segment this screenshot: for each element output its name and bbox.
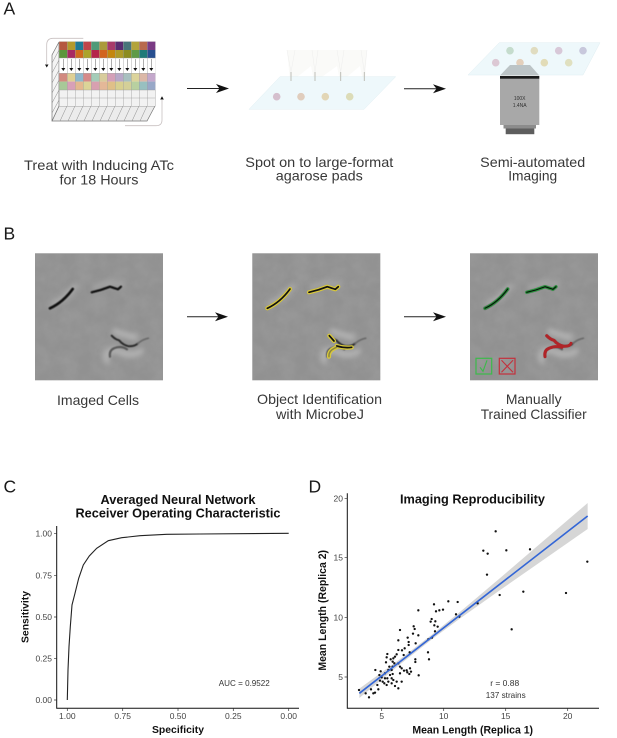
icon: green check box <box>476 358 492 374</box>
chart: reproducibility scatter <box>317 492 599 736</box>
caption: classifier: Trained Classifier <box>481 406 587 422</box>
caption: imaging: Imaging <box>508 168 557 184</box>
caption: classifier <box>481 391 587 422</box>
x tick labels: 10 <box>439 711 449 721</box>
chart title: Averaged Neural Network <box>100 493 256 507</box>
chart title: Receiver Operating Characteristic <box>76 506 281 520</box>
caption: classifier: Manually <box>506 391 562 407</box>
icon: pipette tips over agarose pad <box>249 50 396 109</box>
micrograph: imaged cells <box>35 253 163 380</box>
label: C: C <box>4 477 16 497</box>
y tick labels: 10 <box>334 612 343 622</box>
caption: spot: agarose pads <box>276 168 363 184</box>
x tick labels: 0.75 <box>114 711 131 721</box>
x tick labels: 15 <box>501 711 511 721</box>
y tick labels: 15 <box>334 553 343 563</box>
y tick labels <box>334 494 343 682</box>
correlation annotation <box>486 678 526 700</box>
chart title: Imaging Reproducibility <box>400 492 545 506</box>
caption: treat: for 18 Hours <box>60 171 138 187</box>
y tick labels: 5 <box>338 672 343 682</box>
x tick labels <box>59 711 297 721</box>
caption: object identification <box>257 391 382 422</box>
y tick labels: 0.25 <box>35 654 52 664</box>
arrow: imaged to identified <box>187 312 228 321</box>
caption: spot: Spot on to large-format <box>245 154 393 170</box>
x tick labels: 1.00 <box>59 711 76 721</box>
correlation annotation: 137 strains <box>486 690 526 700</box>
icon: slide and microscope objective <box>468 43 600 134</box>
ROC line <box>67 533 289 700</box>
data points <box>358 530 588 698</box>
caption: treat <box>24 157 174 187</box>
caption: object identification: Object Identification <box>257 391 382 407</box>
arrow: identified to classified <box>404 312 446 321</box>
icon: 96-well plate with colored wells <box>45 38 164 126</box>
y tick labels: 20 <box>334 494 343 504</box>
regression line <box>359 516 588 693</box>
label: B: B <box>4 223 15 243</box>
caption: imaging: Semi-automated <box>480 154 585 170</box>
correlation annotation: r = 0.88 <box>490 678 519 688</box>
x tick labels: 0.25 <box>225 711 242 721</box>
icon: red cross box <box>499 358 515 374</box>
micrograph: object identification <box>252 253 380 380</box>
caption: object identification: with MicrobeJ <box>275 406 364 422</box>
caption: imaging <box>480 154 585 184</box>
plate base hatch <box>52 106 155 121</box>
y axis title: Mean Length (Replica 2) <box>317 550 329 671</box>
y tick labels <box>35 528 52 705</box>
chart title <box>76 493 281 520</box>
arrow: pads to imaging <box>404 84 446 93</box>
y tick labels: 0.75 <box>35 570 52 580</box>
caption: treat: Treat with Inducing ATc <box>24 157 174 173</box>
x tick labels: 0.00 <box>280 711 297 721</box>
y tick labels: 1.00 <box>35 528 52 538</box>
icon: slide and microscope objective: 1.4NA <box>513 103 527 109</box>
x axis title: Specificity <box>152 724 204 736</box>
arrow: plate to pads <box>187 84 229 93</box>
x tick labels <box>379 711 573 721</box>
micrograph: trained classifier <box>470 253 598 380</box>
confidence ribbon <box>359 503 588 698</box>
label: D: D <box>308 477 321 497</box>
y axis title: Sensitivity <box>20 591 32 643</box>
x tick labels: 20 <box>563 711 573 721</box>
x tick labels: 0.50 <box>170 711 187 721</box>
y tick labels: 0.00 <box>35 695 52 705</box>
caption: spot <box>245 154 393 184</box>
AUC annotation: AUC = 0.9522 <box>219 678 270 688</box>
chart: ROC curve <box>20 493 299 736</box>
x tick labels: 5 <box>379 711 384 721</box>
y tick labels: 0.50 <box>35 612 52 622</box>
icon: slide and microscope objective: 100X <box>514 96 526 102</box>
caption: imaged cells: Imaged Cells <box>57 392 139 408</box>
x axis title: Mean Length (Replica 1) <box>412 724 533 736</box>
